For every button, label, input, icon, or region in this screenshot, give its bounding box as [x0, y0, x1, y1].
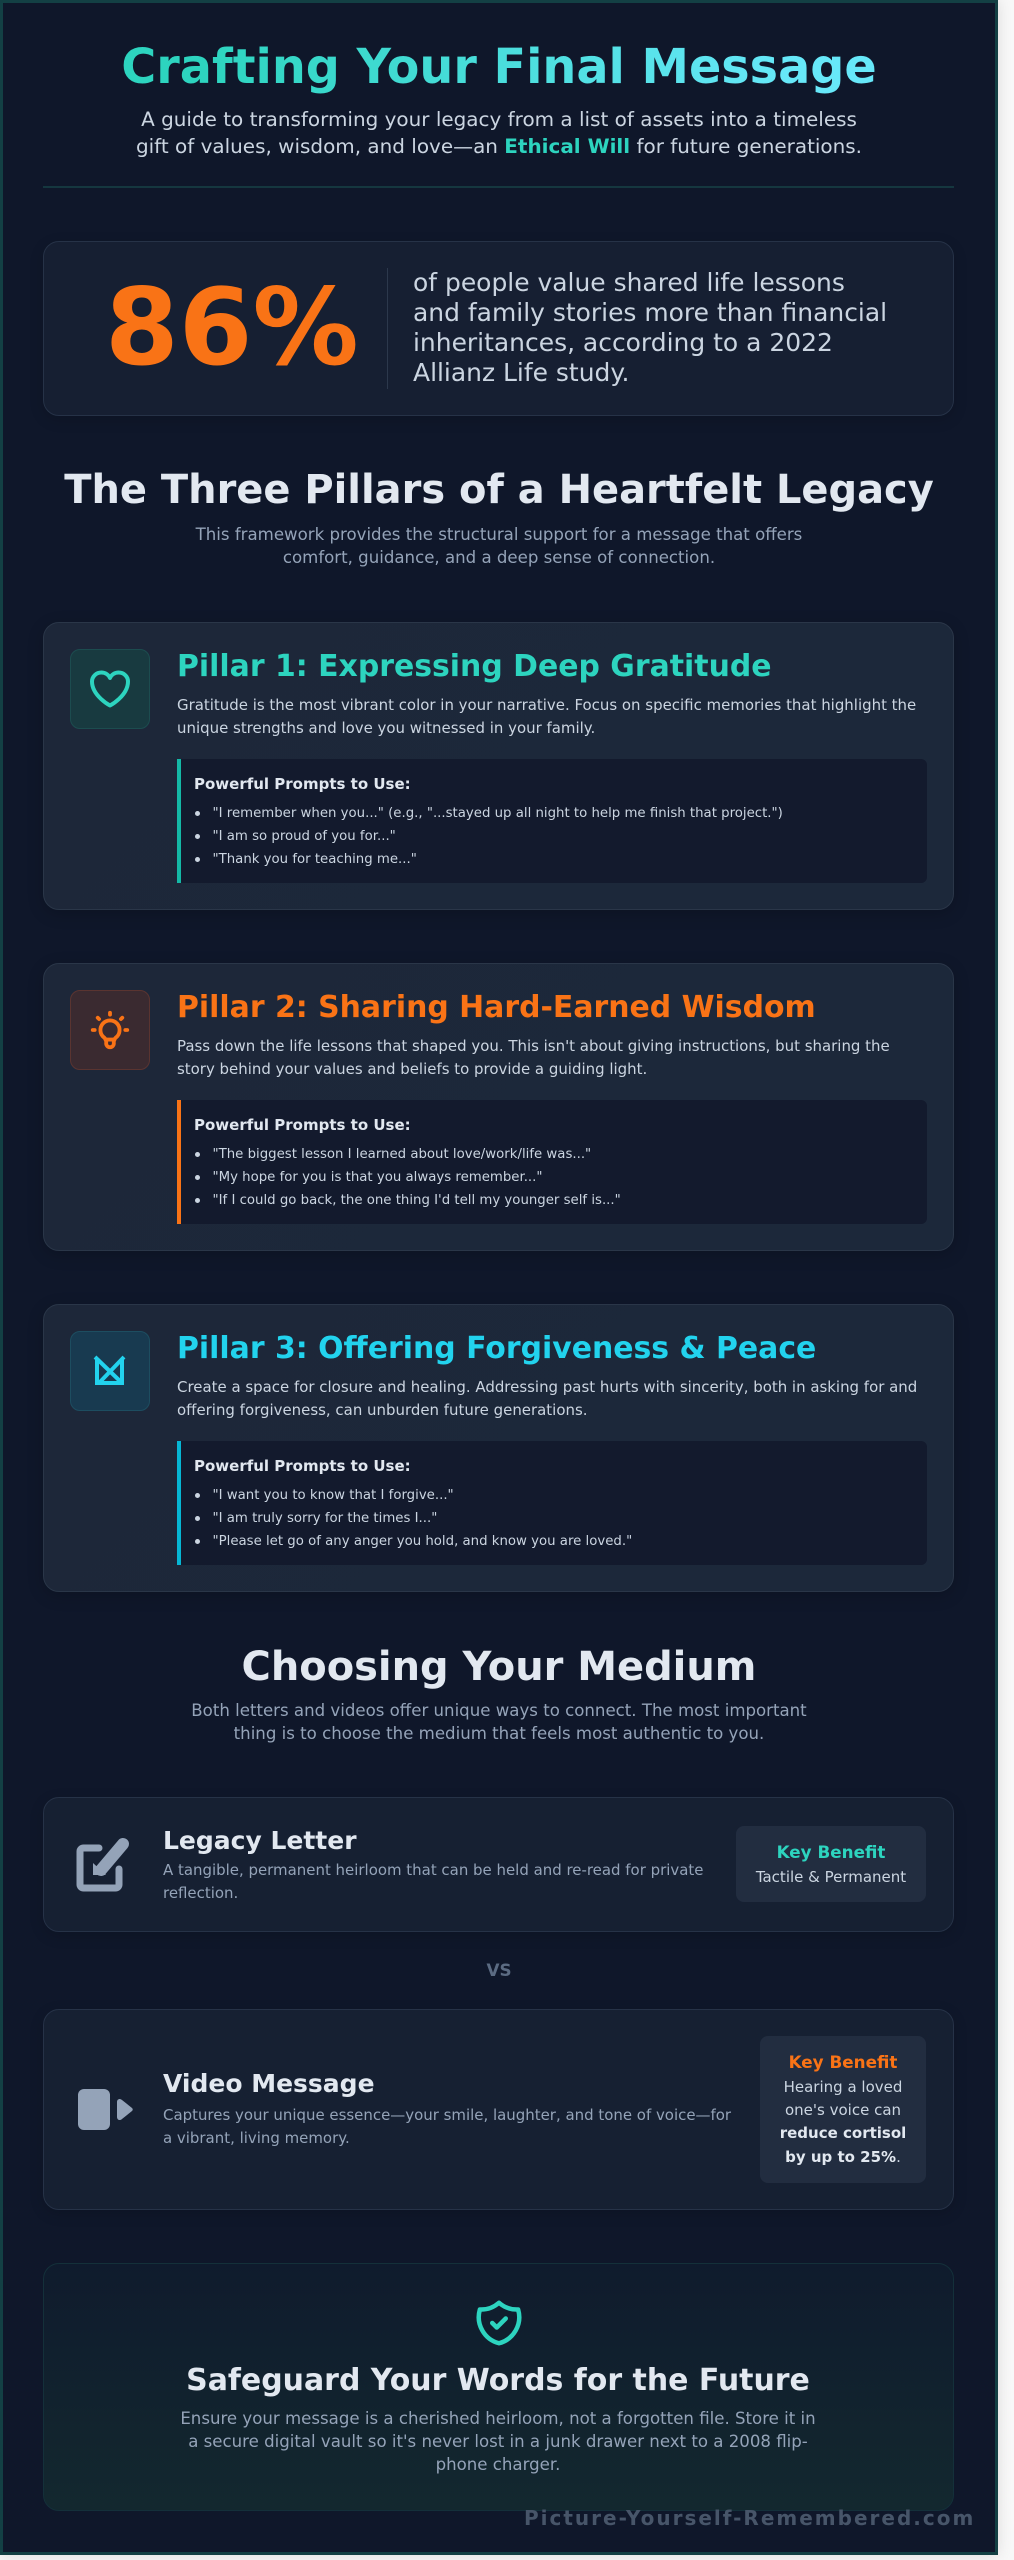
- section intro: pillars: [196, 524, 802, 566]
- key benefit: one's voice can: [785, 2101, 901, 2119]
- section intro: medium: Both letters and videos offer unique ways to connect. The most important: [191, 1701, 807, 1720]
- panel: statistic: [43, 241, 954, 416]
- description: [163, 1861, 703, 1902]
- key benefit: [736, 1826, 926, 1902]
- description: phone charger.: [436, 2455, 560, 2474]
- section intro: medium: thing is to choose the medium that feels most authentic to you.: [234, 1724, 764, 1743]
- heading: Legacy Letter: [163, 1826, 357, 1854]
- icon: heart: [70, 649, 150, 729]
- section intro: medium: [191, 1701, 807, 1743]
- stat text: and family stories more than financial: [413, 298, 887, 326]
- icon: pen on square: [76, 1838, 129, 1892]
- prompts box: [177, 759, 927, 883]
- icon: light bulb: [70, 990, 150, 1070]
- description: a secure digital vault so it's never lost in a junk drawer next to a 2008 flip-: [188, 2432, 808, 2451]
- subtitle: [136, 106, 862, 158]
- section intro: pillars: This framework provides the structural support for a message that offers: [196, 524, 802, 544]
- prompts box: "Thank you for teaching me...": [212, 852, 417, 866]
- footer watermark: Picture-Yourself-Remembered.com: [524, 2506, 975, 2530]
- subtitle: gift of values, wisdom, and love—an Ethical Will for future generations.: [136, 134, 862, 158]
- section heading: pillars: The Three Pillars of a Heartfelt Legacy: [64, 467, 934, 513]
- key benefit: Key Benefit: [777, 1842, 885, 1862]
- prompts box: Powerful Prompts to Use:: [194, 1116, 411, 1134]
- icon: video camera: [78, 2089, 133, 2130]
- stat text: inheritances, according to a 2022: [413, 328, 833, 356]
- key benefit: reduce cortisol: [780, 2124, 906, 2142]
- heading: Safeguard Your Words for the Future: [186, 2363, 810, 2398]
- key benefit: by up to 25%.: [785, 2148, 901, 2166]
- prompts box: "If I could go back, the one thing I'd tell my younger self is...": [212, 1192, 621, 1208]
- prompts box: Powerful Prompts to Use:: [194, 775, 411, 793]
- stat text: Allianz Life study.: [413, 358, 630, 386]
- prompts box: Powerful Prompts to Use:: [194, 1457, 411, 1475]
- description: A tangible, permanent heirloom that can be held and re-read for private: [163, 1861, 703, 1879]
- icon: shield check: [476, 2300, 522, 2346]
- section heading: medium: Choosing Your Medium: [242, 1644, 756, 1690]
- description: Pass down the life lessons that shaped you. This isn't about giving instructions, but sharing the: [177, 1037, 890, 1055]
- key benefit: Key Benefit: [789, 2052, 897, 2072]
- prompts box: [177, 1100, 927, 1224]
- description: [177, 1037, 890, 1078]
- prompts box: "I want you to know that I forgive...": [212, 1488, 454, 1502]
- panel: video message: [43, 2009, 954, 2210]
- panel: legacy letter: [43, 1797, 954, 1932]
- panel: pillar 1: [43, 622, 954, 910]
- title: [3, 38, 995, 98]
- section intro: pillars: comfort, guidance, and a deep sense of connection.: [283, 548, 715, 566]
- prompts box: "I remember when you..." (e.g., "...stayed up all night to help me finish that project."): [212, 806, 783, 820]
- description: story behind your values and beliefs to provide a guiding light.: [177, 1060, 647, 1078]
- panel: safeguard: [43, 2263, 954, 2511]
- prompts box: "The biggest lesson I learned about love/work/life was...": [212, 1146, 591, 1162]
- description: Gratitude is the most vibrant color in your narrative. Focus on specific memories that highlight the: [177, 696, 916, 714]
- header: [121, 40, 877, 158]
- description: unique strengths and love you witnessed in your family.: [177, 719, 595, 737]
- panel: pillar 2: [43, 963, 954, 1251]
- key benefit: Tactile & Permanent: [756, 1868, 906, 1886]
- prompts box: "Please let go of any anger you hold, and know you are loved.": [212, 1534, 632, 1548]
- description: Ensure your message is a cherished heirloom, not a forgotten file. Store it in: [180, 2408, 816, 2428]
- heading: Pillar 3: Offering Forgiveness & Peace: [177, 1330, 816, 1366]
- description: offering forgiveness, can unburden future generations.: [177, 1401, 588, 1419]
- stat number: 86%: [105, 266, 359, 389]
- vs label: VS: [486, 1960, 512, 1980]
- description: Captures your unique essence—your smile, laughter, and tone of voice—for: [163, 2106, 731, 2124]
- description: [163, 2106, 731, 2147]
- heading: Video Message: [163, 2068, 375, 2098]
- description: a vibrant, living memory.: [163, 2129, 350, 2147]
- key benefit: Hearing a loved: [784, 2078, 902, 2096]
- prompts box: [177, 1441, 927, 1565]
- prompts box: "I am truly sorry for the times I...": [212, 1510, 437, 1526]
- prompts box: "I am so proud of you for...": [212, 828, 396, 844]
- description: Create a space for closure and healing. Addressing past hurts with sincerity, both in asking for and: [177, 1378, 917, 1396]
- icon: forgiveness: [70, 1331, 150, 1411]
- stat text: [413, 268, 887, 386]
- panel: pillar 3: [43, 1304, 954, 1592]
- heading: Pillar 1: Expressing Deep Gratitude: [177, 648, 772, 684]
- description: reflection.: [163, 1884, 238, 1902]
- heading: Pillar 2: Sharing Hard-Earned Wisdom: [177, 990, 816, 1024]
- stat text: of people value shared life lessons: [413, 268, 845, 296]
- description: [177, 696, 916, 737]
- title: Crafting Your Final Message: [121, 40, 877, 95]
- description: [180, 2408, 816, 2474]
- prompts box: "My hope for you is that you always remember...": [212, 1170, 542, 1184]
- key benefit: [760, 2036, 926, 2183]
- description: [177, 1378, 917, 1419]
- subtitle: A guide to transforming your legacy from a list of assets into a timeless: [141, 106, 857, 130]
